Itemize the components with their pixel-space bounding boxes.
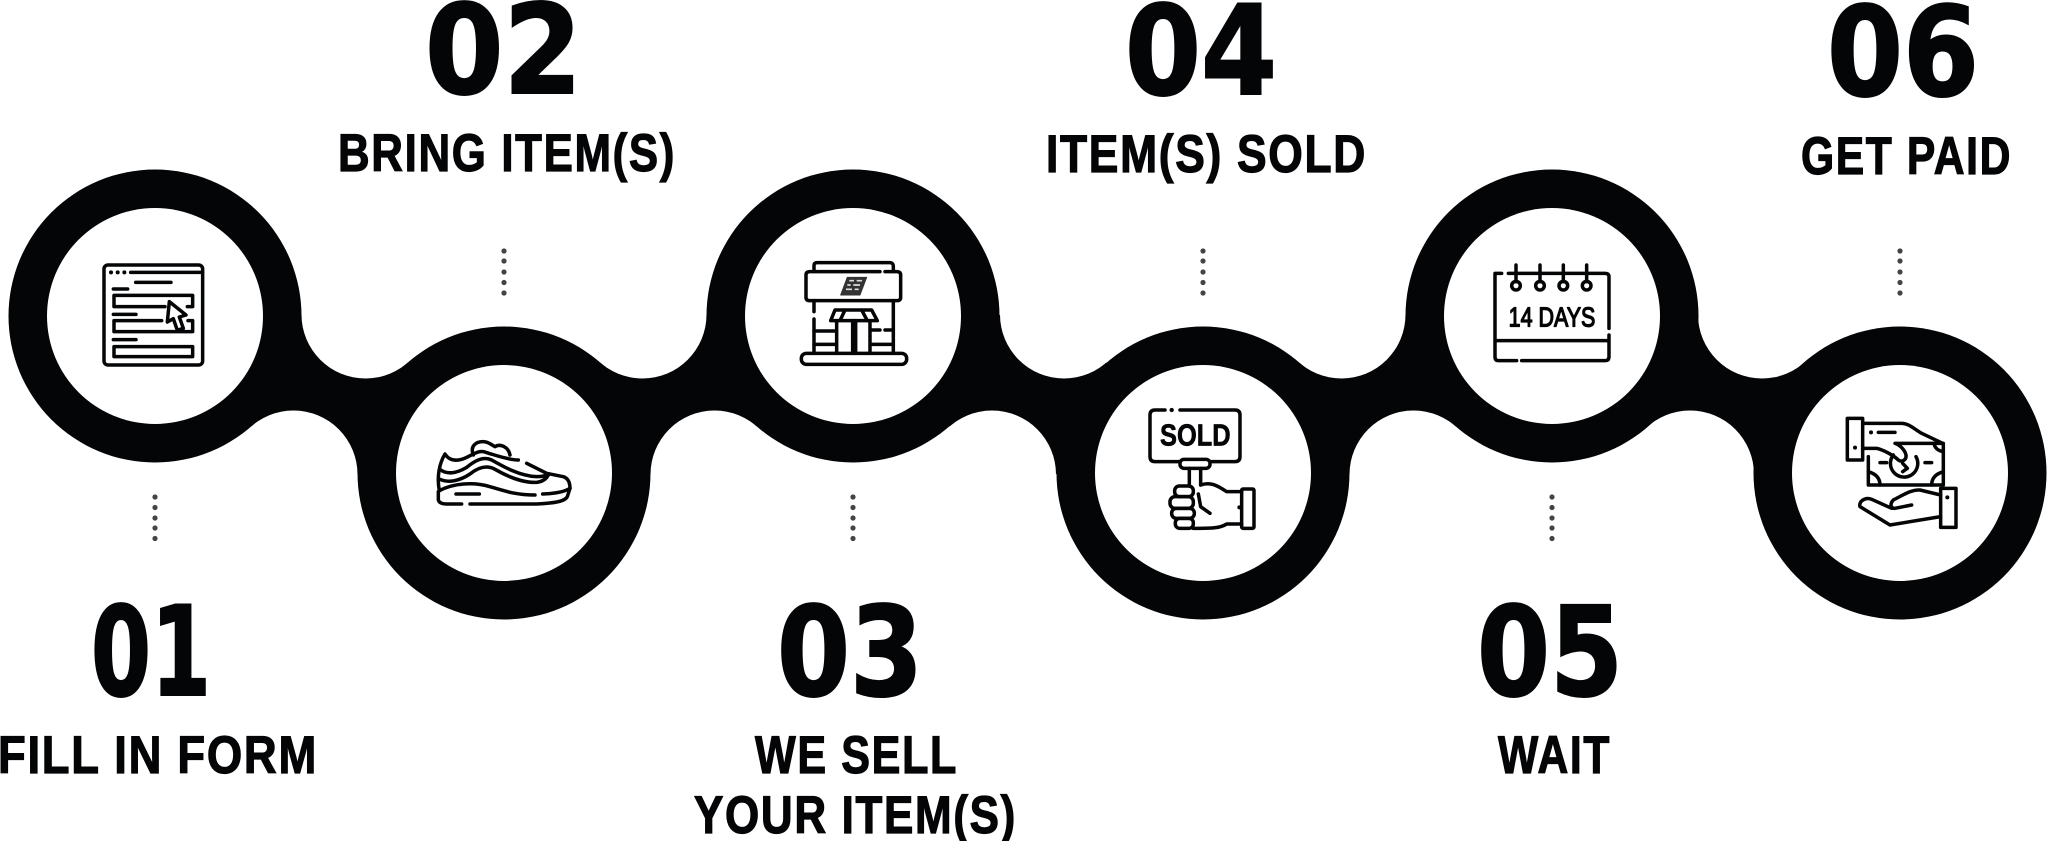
icon: web form with cursor	[104, 265, 203, 365]
step 05 label: WAIT	[1498, 726, 1611, 785]
step 03 label	[694, 726, 1017, 841]
dotted leader: step 4	[1200, 248, 1206, 296]
step 01 label: FILL IN FORM	[0, 726, 318, 785]
connected chain of six rings	[8, 170, 2046, 620]
step 01 number: 01	[91, 581, 211, 725]
step 03 number: 03	[777, 581, 923, 725]
step 05 number: 05	[1477, 581, 1623, 725]
icon: sneaker	[438, 442, 570, 504]
step 02 label: BRING ITEM(S)	[338, 124, 676, 183]
icon: money handed over	[1847, 418, 1956, 527]
dotted leader: step 2	[501, 248, 507, 296]
icon: hand holding sold sign: SOLD	[1160, 419, 1231, 453]
step 04 label: ITEM(S) SOLD	[1046, 125, 1367, 184]
dotted leader: step 6	[1897, 248, 1903, 296]
dotted leader: step 1	[152, 494, 158, 541]
icon: calendar 14 days	[1495, 265, 1609, 361]
icon: hand holding sold sign	[1150, 410, 1254, 528]
icon: storefront	[801, 263, 907, 364]
icon: calendar 14 days: 14 DAYS	[1509, 301, 1595, 332]
dotted leader: step 3	[850, 494, 856, 541]
dotted leader: step 5	[1549, 494, 1555, 541]
step 03 label: WE SELL	[755, 726, 958, 785]
